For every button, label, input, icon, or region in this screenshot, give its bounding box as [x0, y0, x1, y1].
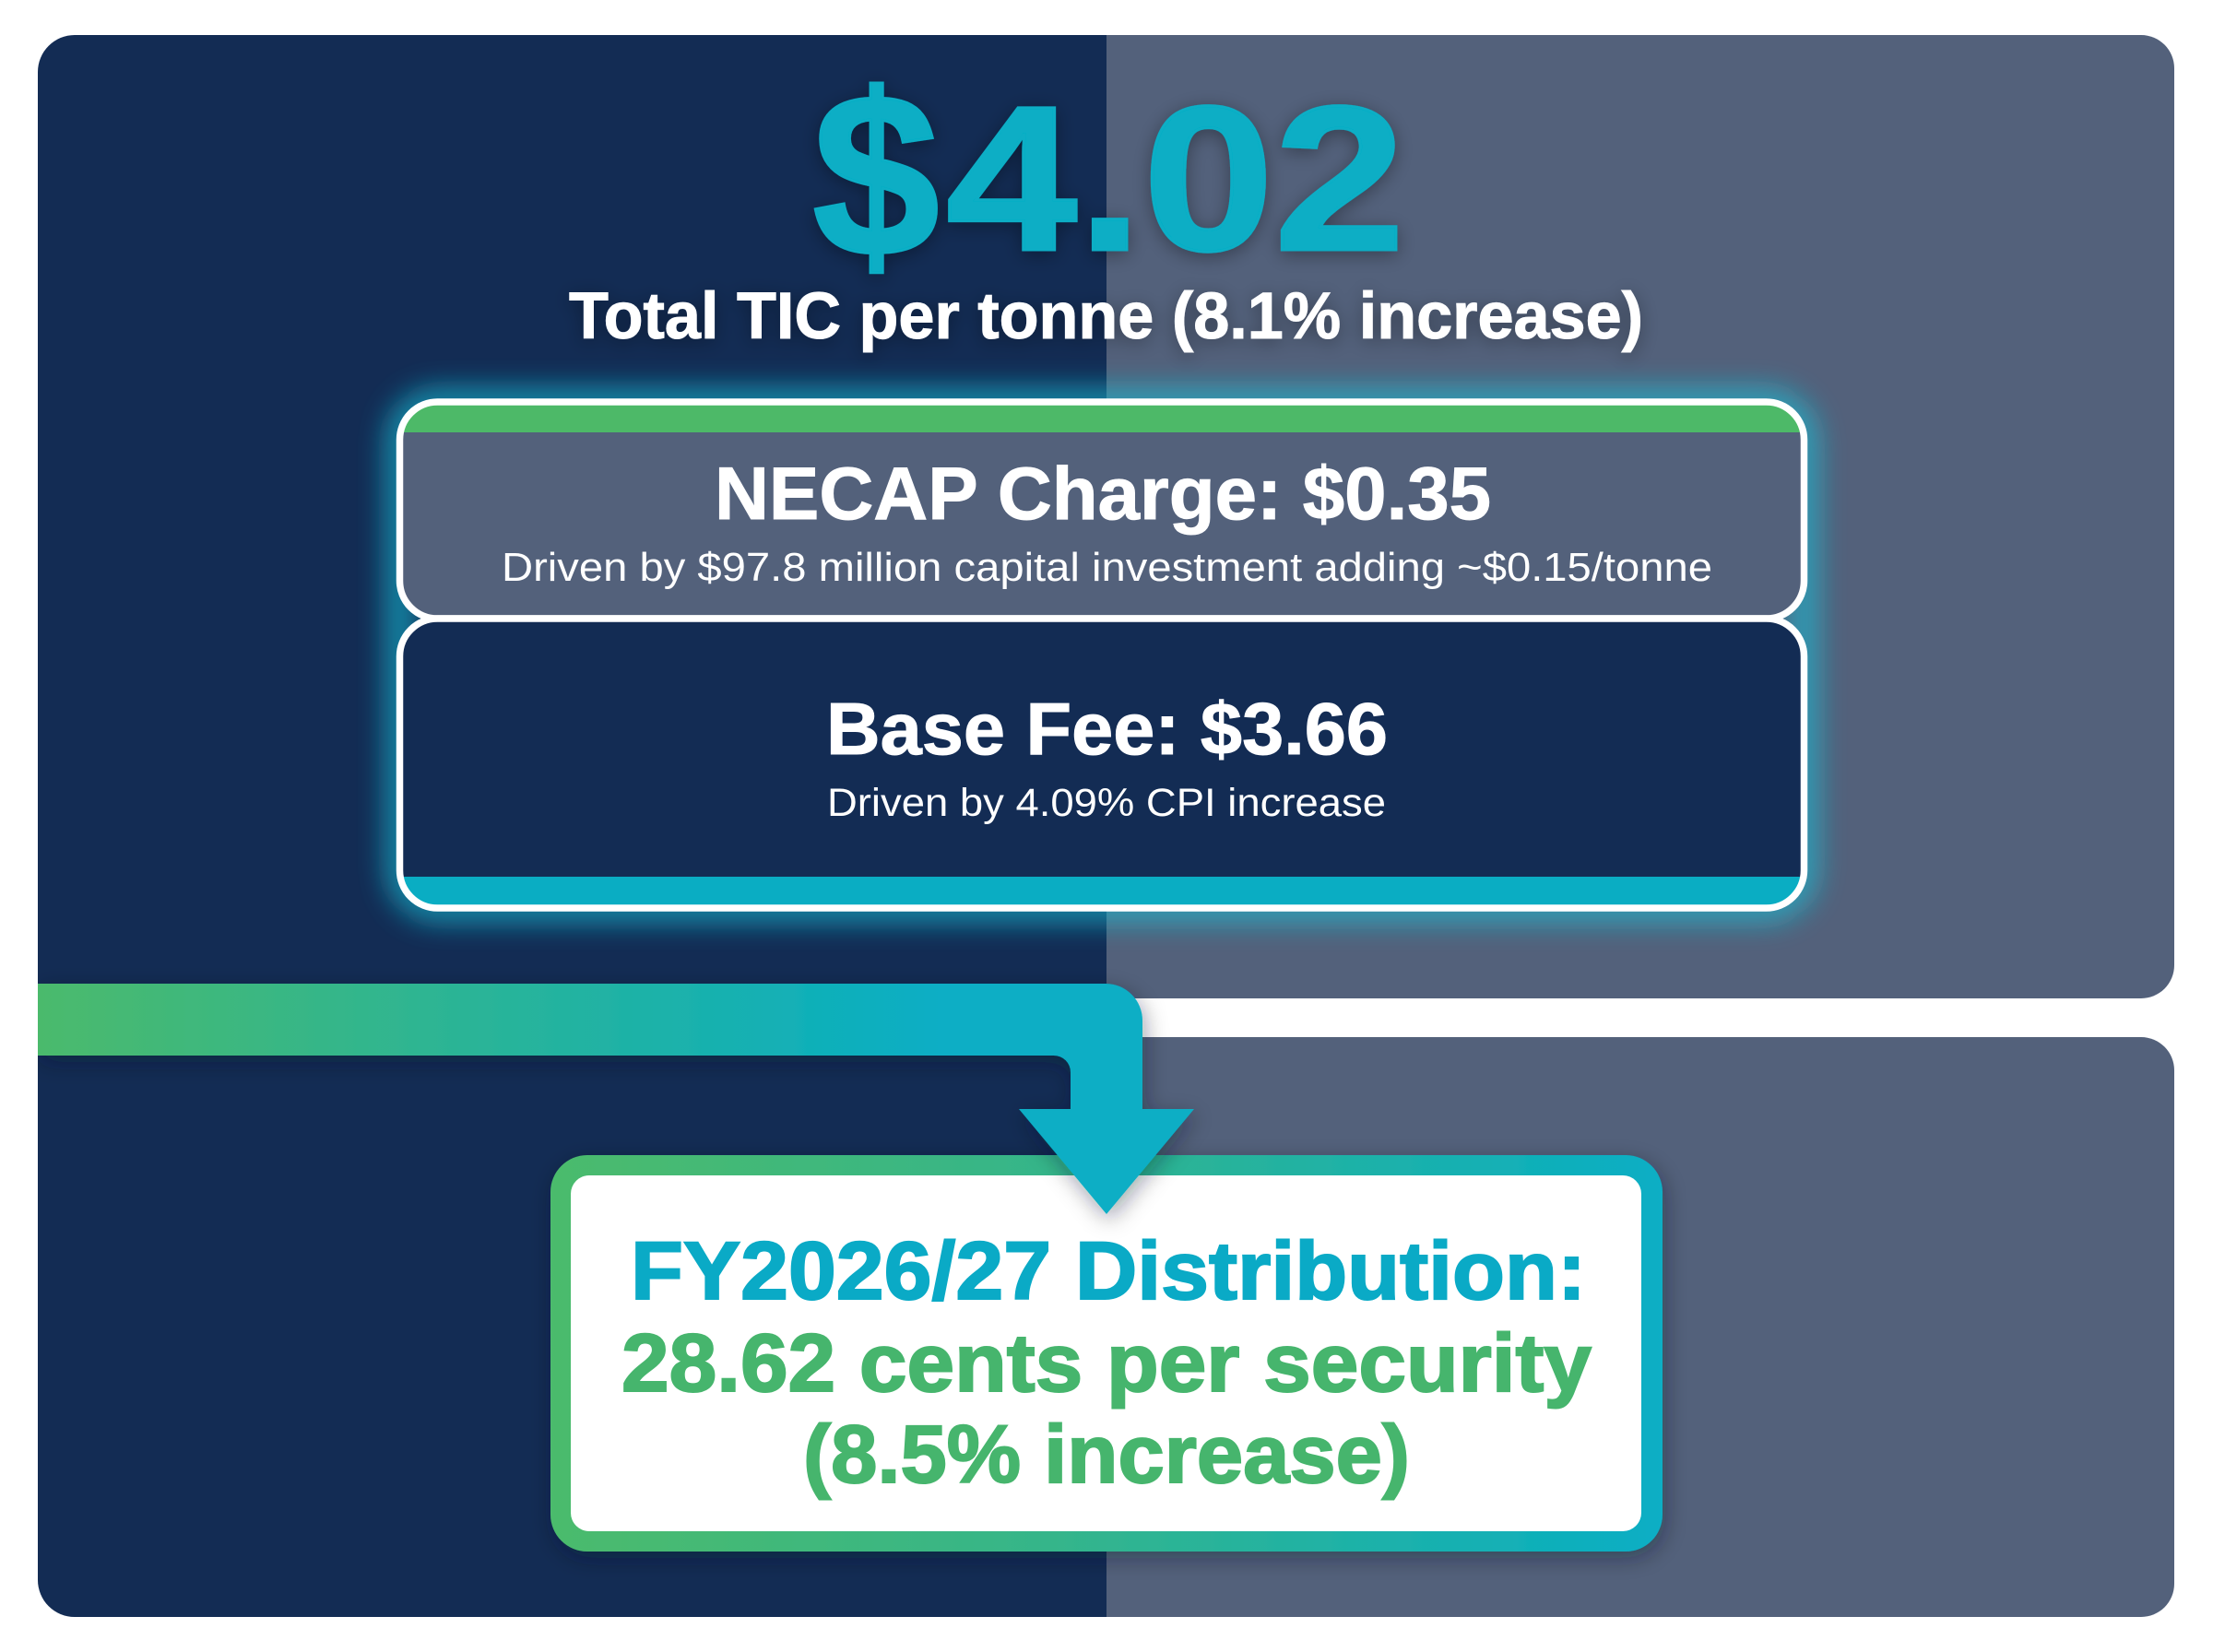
panel: bottom right slate background	[1106, 1037, 2174, 1617]
heading: NECAP charge: NECAP Charge: $0.35	[715, 453, 1491, 536]
detail: base fee driver: Driven by 4.09% CPI increase	[827, 781, 1386, 825]
panel: NECAP charge card	[396, 398, 1807, 619]
detail: NECAP driver: Driven by $97.8 million capital investment adding ~$0.15/tonne	[502, 545, 1712, 590]
panel: top right slate background	[1106, 35, 2174, 998]
big number: total TIC	[812, 46, 1405, 305]
panel: left navy background	[38, 35, 1106, 1617]
distribution increase: (8.5% increase)	[803, 1408, 1410, 1500]
big number: total TIC: 4.02	[946, 64, 1405, 294]
heading: base fee: Base Fee: $3.66	[826, 688, 1388, 770]
subtitle: total TIC per tonne: Total TIC per tonne (8.1% increase)	[569, 280, 1643, 353]
arrow: from bar down to distribution box	[38, 984, 1194, 1214]
callout: FY2026/27 distribution box	[550, 1155, 1663, 1552]
cyan bottom band	[404, 877, 1800, 905]
panel: base fee card	[396, 619, 1807, 912]
big number: total TIC: $	[812, 46, 940, 305]
distribution amount: 28.62 cents per security	[621, 1316, 1592, 1409]
distribution title: FY2026/27 Distribution:	[631, 1224, 1586, 1316]
green top band	[404, 406, 1800, 432]
